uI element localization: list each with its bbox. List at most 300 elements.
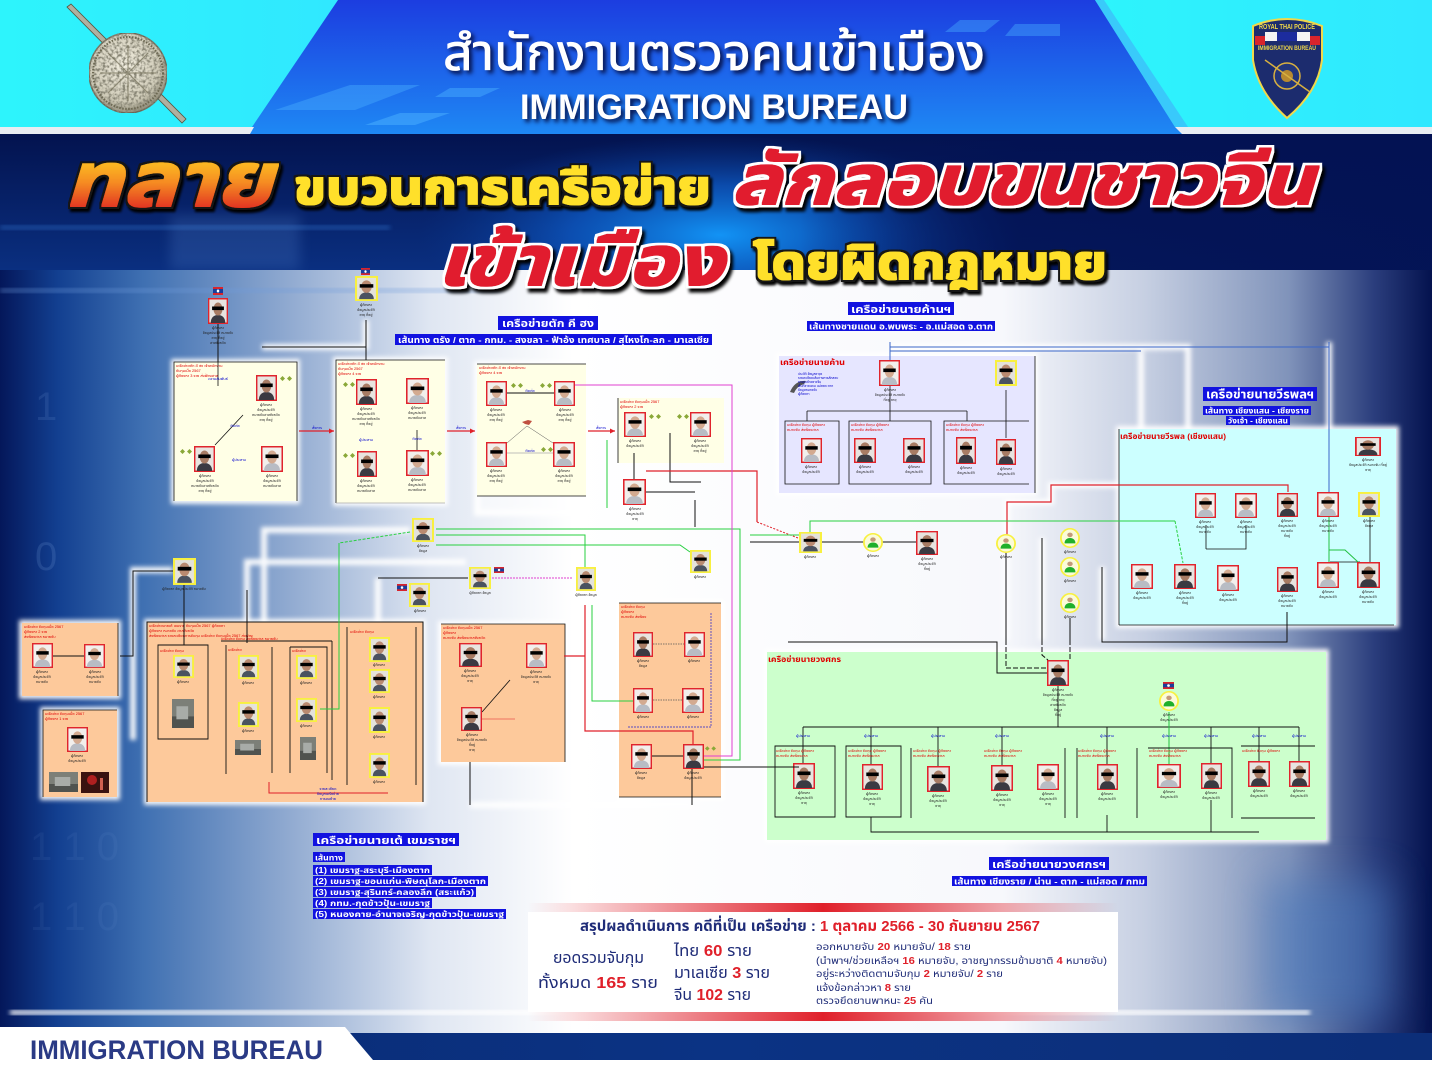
panel: Khan network (lavender): พื้นที่ชายแดน แม่สอด ตาก	[798, 383, 833, 388]
panel: Khan network (lavender): ผู้ต้องหา	[798, 392, 810, 396]
suspect	[1158, 765, 1180, 799]
photo: arrest at night	[81, 772, 109, 793]
panel: orange D	[441, 624, 565, 762]
panel: orange E: เครือข่าย จับกุม	[621, 604, 645, 609]
headline words: smuggling Chinese: ลักลอบขนชาวจีน	[731, 142, 1319, 219]
suspect: ผู้ต้องหา	[558, 469, 571, 473]
suspect: ผู้ต้องหา	[629, 439, 642, 443]
suspect: ผู้ต้องหา	[360, 479, 373, 483]
suspect	[1290, 762, 1309, 798]
panel: Khan network (lavender): หมายจับ ส่งฟ้องศาล	[851, 427, 883, 432]
suspect: ผู้ต้องหา	[798, 791, 811, 795]
suspect	[632, 745, 651, 780]
suspect: หมายจับศาล	[357, 489, 375, 493]
suspect: หมายจับศาลจังหวัด	[191, 484, 219, 488]
suspect: อายุ	[869, 802, 875, 806]
suspect: ผู้ต้องหา	[373, 735, 386, 739]
suspect: ที่อยู่	[469, 742, 475, 747]
suspect: ผู้ต้องหา	[635, 771, 648, 775]
suspect: ข้อมูลประวัติ	[1202, 796, 1220, 800]
suspect: อายุ	[467, 679, 473, 683]
icon: rank markers	[180, 449, 192, 454]
icon: Royal Thai Police immigration badge: ROYAL THAI POLICE	[1259, 22, 1315, 31]
suspect: Wongsakorn leader	[1043, 661, 1073, 717]
suspect: ผู้ต้องหา	[960, 466, 973, 470]
panel: Weeraphon network (cyan)	[1119, 429, 1396, 625]
suspect: ที่อยู่	[924, 566, 930, 571]
suspect: ผู้ต้องหา	[177, 680, 190, 684]
route: Wongsakorn network: เส้นทาง เชียงราย / น่าน - ตาก - แม่สอด / กทม	[954, 876, 1145, 886]
icon: rank markers	[280, 376, 292, 381]
suspect	[487, 443, 506, 483]
panel: left small orange A: ส่งฟ้องศาล หมายจับ	[24, 634, 56, 639]
suspect: อายุ ที่อยู่	[489, 417, 503, 422]
photo	[300, 737, 316, 760]
icon: Royal Thai Police immigration badge: IMMIGRATION BUREAU	[1258, 45, 1316, 52]
suspect: ผู้ต้องหา	[1205, 791, 1218, 795]
suspect: หมายจับ	[1240, 530, 1252, 534]
suspect	[800, 533, 821, 559]
connector lines between networks	[120, 320, 1329, 805]
warrant details: แจ้งข้อกล่าวหา 8 ราย	[816, 981, 911, 994]
route: Khan network: เส้นทางชายแดน อ.พบพระ - อ.แม่สอด จ.ตาก	[809, 320, 993, 332]
summary panel	[528, 903, 1118, 1021]
total arrests: ยอดรวมจับกุม	[553, 950, 644, 967]
suspect: หมายจับศาลจังหวัด	[252, 413, 280, 417]
suspect: ข้อมูลประวัติ	[1290, 794, 1308, 798]
warrant details: (นำพาฯ/ช่วยเหลือฯ 16 หมายจับ, อาชญากรรมข้ามชาติ 4 หมายจับ)	[816, 954, 1107, 967]
suspect: อายุ	[935, 804, 941, 808]
footer band	[0, 1027, 1432, 1070]
avatar: ผู้ต้องหา	[1064, 615, 1077, 619]
suspect: ที่อยู่	[1284, 533, 1290, 538]
route: Dak Ki Hong network: เส้นทาง ตรัง / ตาก - กทม. - สงขลา - ฟ้าอ้ง เทศบาล / สุไหงโก-ลก - มาเลเซีย	[398, 335, 709, 345]
suspect	[1349, 438, 1387, 472]
leader suspect: อายุ ที่อยู่	[211, 335, 225, 340]
suspect	[575, 568, 597, 597]
suspect: ผู้ต้องหา	[1199, 520, 1212, 524]
suspect: ข้อมูลประวัติ	[856, 470, 874, 474]
suspect: ข้อมูลประวัติ	[993, 798, 1011, 802]
panel: cream cell 1	[174, 350, 297, 501]
green lines	[320, 440, 1175, 760]
suspect: อายุ	[801, 801, 807, 805]
title: Dak Ki Hong network: เครือข่ายตัก คี ฮง	[502, 317, 594, 330]
suspect: ข้อมูลประวัติ	[408, 411, 426, 415]
avatar	[1160, 692, 1178, 722]
suspect: ข้อมูลประวัติ	[1319, 524, 1337, 528]
suspect: หมายจับ	[36, 680, 48, 684]
title: Khan network: เครือข่ายนายค้านฯ	[851, 303, 951, 316]
suspect: ข้อมูล	[639, 664, 647, 668]
panel: Wongsakorn network (green): หมายจับ ส่งฟ้องศาล	[1149, 753, 1181, 758]
route: Weeraphon network: เส้นทาง เชียงแสน - เชียงราย	[1205, 405, 1309, 416]
suspect	[1318, 563, 1338, 599]
panel: cream cell 4	[618, 398, 724, 463]
headline: second line	[437, 223, 1107, 300]
suspect	[297, 656, 316, 685]
suspect: ข้อมูลประวัติ หมายจับ	[875, 393, 905, 397]
suspect	[407, 451, 428, 492]
avatar	[1061, 558, 1079, 583]
suspect: ผู้ต้องหา	[1101, 792, 1114, 796]
suspect	[457, 708, 487, 752]
suspect: อายุ ที่อยู่	[558, 417, 572, 422]
icon: rank markers	[705, 746, 716, 751]
suspect	[252, 376, 280, 422]
suspect: ผู้ต้องหา	[1136, 591, 1149, 595]
icon: rank markers	[649, 414, 661, 419]
suspect: ผู้ต้องหา	[411, 478, 424, 482]
suspect: ผู้ต้องหา	[490, 469, 503, 473]
suspect	[875, 361, 905, 402]
title and routes: Te Khemarat network: (1) เขมราฐ-สระบุรี-เมืองตาก	[315, 865, 430, 875]
suspect: ผู้ต้องหา	[242, 681, 255, 685]
suspect	[487, 382, 506, 422]
suspect: ข้อมูลประวัติ หมายจับ	[521, 675, 551, 679]
suspect: ผู้ต้องหา	[687, 715, 700, 719]
panel: cream cell 1: ความสัมพันธ์	[208, 377, 228, 381]
panel: Te Khemarat main orange: เครือข่าย จับกุม ส่งฟ้องศาล หมายจับ	[221, 636, 278, 641]
suspect	[469, 568, 491, 595]
background: navy band and lower light area: 0	[35, 535, 57, 579]
suspect: หมายจับศาล	[408, 416, 426, 420]
suspect: ผู้ต้องหา	[1222, 593, 1235, 597]
avatar	[997, 535, 1015, 559]
panel: Te Khemarat main orange: เครือข่าย จับกุม	[160, 648, 184, 653]
suspect: หมายจับ	[89, 680, 101, 684]
blue lines	[890, 342, 1329, 492]
suspect: ผู้ต้องหา ข้อมูลประวัติ หมายจับ	[162, 587, 206, 591]
connector lines between networks: สั่งการ	[456, 425, 466, 430]
panel: Te Khemarat main orange: ผู้ต้องหา หมายจับ ศาลจังหวัด	[149, 628, 195, 633]
icon: rank markers	[343, 453, 355, 458]
title and routes: Te Khemarat network	[313, 833, 506, 919]
suspect	[1236, 494, 1256, 534]
suspect: ข้อมูลประวัติ	[1196, 525, 1214, 529]
suspect: ข้อมูลประวัติ	[684, 776, 702, 780]
suspect: ผู้ต้องหา	[414, 609, 427, 613]
icon: Royal Thai Police immigration badge	[1253, 19, 1322, 118]
panel: Te Khemarat main orange: ส่งฟ้องศาล รายละเอียดการจับกุม เครือข่าย จับกุมเมื่อ 2567 ส่งฟ้อง	[149, 633, 253, 638]
panel: orange D: เครือข่าย จับกุมเมื่อ 2567	[443, 625, 482, 630]
suspect: ผู้ต้องหา	[996, 793, 1009, 797]
suspect: อายุ	[533, 680, 539, 684]
suspect: หมายจับ	[1362, 600, 1374, 604]
leader suspect: ข้อมูลประวัติ หมายจับ	[203, 331, 233, 335]
suspect: อายุ ที่อยู่	[359, 421, 373, 426]
suspect: Wongsakorn leader: ที่อยู่	[1055, 712, 1061, 717]
panel: cream cell 1: เครือข่ายตัก คี ฮง เจ้าพนักงาน	[176, 363, 223, 368]
red top bar	[528, 903, 1118, 912]
suspect: below cell 4	[624, 480, 645, 521]
title: Weeraphon network: เครือข่ายนายวีรพลฯ	[1206, 388, 1314, 402]
suspect: ข้อมูลประวัติ	[33, 675, 51, 679]
suspect: ผู้ต้องหา	[242, 729, 255, 733]
leader suspect: ผู้ต้องหา	[360, 303, 373, 307]
suspect: ข้อมูลประวัติ	[1219, 598, 1237, 602]
suspect: ผู้ต้องหา	[804, 555, 817, 559]
suspect: Wongsakorn leader: ข้อมูล	[1054, 708, 1062, 712]
suspect: ผู้ต้องหา	[1322, 590, 1335, 594]
header band	[0, 0, 1432, 134]
arrests by nationality: จีน 102 ราย	[674, 987, 751, 1004]
suspect: ผู้ต้องหา	[866, 792, 879, 796]
panel: left small orange A: ผู้ต้องหา 2 ราย	[24, 629, 47, 634]
suspect: below cell 4: ข้อมูลประวัติ	[626, 512, 644, 516]
panel: Wongsakorn network (green): ผู้ประสาน	[995, 734, 1009, 738]
suspect: ข้อมูลประวัติ	[929, 799, 947, 803]
leader suspect: อายุ ที่อยู่	[359, 312, 373, 317]
panel: cream cell 2: จับกุมเมื่อ 2567	[338, 366, 363, 371]
suspect	[928, 767, 949, 808]
suspect: ผู้ต้องหา	[688, 659, 701, 663]
suspect: ข้อมูลประวัติ	[1319, 595, 1337, 599]
suspect: อายุ	[1045, 802, 1051, 806]
avatar	[1061, 594, 1079, 619]
suspect: ผู้ต้องหา	[490, 408, 503, 412]
black lines	[120, 320, 1287, 805]
photo	[235, 740, 261, 755]
suspect: ผู้ต้องหา	[1042, 792, 1055, 796]
headline words: network process: ขบวนการเครือข่าย	[294, 161, 711, 214]
suspect: ผู้ต้องหา ข้อมูล	[469, 591, 491, 595]
panel: Te Khemarat main orange: เครือข่าย	[228, 647, 242, 652]
suspect: ข้อมูลประวัติ	[795, 796, 813, 800]
suspect: หมายจับ	[1322, 529, 1334, 533]
suspect: ข้อมูลประวัติ	[691, 444, 709, 448]
panel: Wongsakorn network (green): เครือข่าย จับกุม ผู้ต้องหา	[1242, 748, 1281, 753]
headline word: enter: เข้าเมือง	[437, 223, 727, 300]
suspect	[413, 519, 433, 553]
panel: Wongsakorn network (green): เครือข่าย จับกุม ผู้ต้องหา	[1078, 748, 1117, 753]
header title: English: IMMIGRATION BUREAU	[520, 88, 908, 127]
suspect	[174, 656, 193, 684]
white glow connectors behind the diagram	[22, 320, 1396, 840]
suspect: ข้อมูลประวัติ	[1278, 599, 1296, 603]
photo	[172, 699, 194, 728]
panel: Khan network (lavender): การขนย้ายชาวจีน	[798, 380, 821, 384]
panel: Te Khemarat main orange: เครือข่ายนายเต้ เขมราช จับกุมเมื่อ 2567 ผู้ต้องหา	[149, 623, 225, 628]
suspect: ข้อมูลประวัติ	[905, 470, 923, 474]
suspect: ผู้ต้องหา	[1179, 591, 1192, 595]
suspect	[691, 413, 710, 453]
suspect: ผู้ต้องหา	[260, 403, 273, 407]
suspect	[352, 380, 380, 426]
flag	[494, 567, 504, 573]
suspect: ข้อมูลประวัติ	[86, 675, 104, 679]
panel: orange D: ผู้ต้องหา	[443, 630, 457, 635]
panel: Wongsakorn network (green): ผู้ประสาน	[931, 734, 945, 738]
warrant details: ตรวจยึดยานพาหนะ 25 คัน	[816, 995, 933, 1007]
suspect: ข้อมูล	[419, 549, 427, 553]
route: Weeraphon network	[1203, 405, 1311, 426]
suspect: ผู้ต้องหา	[1281, 519, 1294, 523]
suspect: ข้อมูลประวัติ	[1133, 596, 1151, 600]
suspect: หมายจับศาล	[263, 484, 281, 488]
panel: Wongsakorn network (green): หมายจับ ส่งฟ้องศาล	[776, 753, 808, 758]
suspect	[794, 764, 814, 805]
suspect: ผู้ต้องหา	[1362, 458, 1375, 462]
panel: cream cell 4: ผู้ต้องหา 2 ราย	[620, 404, 643, 409]
panel: cream cell 3: ผู้ต้องหา 4 ราย	[479, 370, 502, 375]
suspect: ผู้ต้องหา	[637, 715, 650, 719]
avatar: ผู้ต้องหา	[1000, 555, 1013, 559]
suspect: Wongsakorn leader: ที่อยู่ อายุ	[1051, 697, 1065, 702]
icon: sword and silver medal emblem	[67, 4, 186, 123]
suspect	[1318, 493, 1338, 533]
suspect: ข้อมูลประวัติ	[1160, 795, 1178, 799]
suspect	[33, 644, 52, 684]
suspect	[1175, 565, 1195, 605]
suspect	[555, 382, 574, 422]
suspect	[684, 745, 703, 780]
title and routes: Te Khemarat network: เส้นทาง	[315, 852, 343, 862]
warrant details: ออกหมายจับ 20 หมายจับ/ 18 ราย	[816, 941, 971, 953]
suspect	[683, 689, 703, 719]
title: Dak Ki Hong network	[498, 316, 598, 330]
total arrests: ทั้งหมด 165 ราย	[538, 972, 658, 992]
suspect: ผู้ต้องหา	[1281, 594, 1294, 598]
leader suspect	[203, 299, 233, 345]
footer label: IMMIGRATION BUREAU	[30, 1035, 323, 1065]
suspect: ข้อมูลประวัติ	[461, 674, 479, 678]
suspect: ข้อมูลประวัติ	[1098, 797, 1116, 801]
suspect: ผู้ต้องหา	[36, 670, 49, 674]
panel: Wongsakorn network (green): ผู้ประสาน	[1204, 734, 1218, 738]
suspect: Wongsakorn leader: ข้อมูลประวัติ หมายจับ	[1043, 693, 1073, 697]
suspect	[863, 765, 882, 806]
suspect: ผู้ต้องหา	[559, 408, 572, 412]
suspect: ผู้ต้องหา	[300, 724, 313, 728]
suspect: ข้อมูลประวัติ	[863, 797, 881, 801]
suspect: ข้อมูลประวัติ	[1039, 797, 1057, 801]
panel: Te Khemarat main orange: การขนย้าย	[320, 797, 336, 801]
panel: Wongsakorn network (green): เครือข่าย จับกุม ผู้ต้องหา	[1149, 748, 1188, 753]
arrests by nationality: ไทย 60 ราย	[673, 943, 752, 960]
panel: cream cell 3: ติดต่อ	[525, 389, 535, 393]
suspect: ข้อมูลประวัติ	[487, 413, 505, 417]
suspect: ผู้ต้องหา	[89, 670, 102, 674]
icon: rank markers	[541, 447, 553, 452]
suspect: ผู้ต้องหา	[464, 669, 477, 673]
panel: cream cell 1: ติดต่อ	[230, 424, 240, 428]
suspect: ผู้ต้องหา	[694, 439, 707, 443]
suspect	[1278, 494, 1297, 538]
suspect	[996, 361, 1016, 385]
suspect: ผู้ต้องหา	[859, 465, 872, 469]
suspect: ข้อมูลประวัติ หมายจับ	[457, 738, 487, 742]
suspect: หมายจับ	[1281, 604, 1293, 608]
panel: left small orange B: เครือข่าย จับกุมเมื่อ 2567	[45, 711, 84, 716]
panel: cream cell 2	[336, 360, 445, 503]
suspect	[370, 708, 389, 739]
suspect: อายุ ที่อยู่	[198, 488, 212, 493]
headline words: illegally: โดยผิดกฎหมาย	[753, 236, 1107, 289]
avatar: ข้อมูลประวัติ	[1160, 718, 1178, 722]
panel: orange D: หมายจับ ส่งฟ้องศาลจังหวัด	[443, 635, 486, 640]
suspect: หมายจับ	[1281, 529, 1293, 533]
suspect: อายุ	[469, 748, 475, 752]
suspect: ข้อมูลประวัติ	[556, 413, 574, 417]
suspect: ข้อมูลประวัติ	[1278, 524, 1296, 528]
avatar: ผู้ต้องหา	[1163, 713, 1176, 717]
suspect: ข้อมูลประวัติ	[196, 479, 214, 483]
suspect: ข้อมูลประวัติ	[357, 484, 375, 488]
panel: left small orange A	[22, 623, 118, 696]
panel: Te Khemarat main orange: รายละเอียด	[320, 787, 337, 791]
icon: rank markers	[540, 383, 552, 388]
panel: Wongsakorn network (green): หมายจับ ส่งฟ้องศาล	[913, 753, 945, 758]
suspect	[802, 439, 821, 474]
suspect: ข้อมูลประวัติ	[1359, 595, 1377, 599]
suspect	[997, 440, 1015, 476]
title and routes: Te Khemarat network: (4) กทม.-กุดข้าวปุ้น-เขมราฐ	[315, 898, 431, 908]
suspect	[685, 633, 704, 663]
suspect	[191, 447, 219, 493]
avatar: ผู้ต้องหา	[867, 554, 880, 558]
middle yellow suspects	[162, 519, 1079, 619]
panel: Wongsakorn network (green): เครือข่าย จับกุม ผู้ต้องหา	[913, 748, 952, 753]
icon: rank markers	[677, 414, 689, 419]
suspect: ที่อยู่ อายุ	[883, 397, 897, 402]
panel: orange E: หมายจับ ส่งฟ้อง	[621, 614, 646, 619]
connector lines between networks: สั่งการ	[312, 425, 322, 430]
panel: Khan network (lavender): เครือข่าย จับกุม ผู้ต้องหา	[787, 422, 826, 427]
panel: cream cell 2: ติดต่อ	[412, 437, 422, 441]
suspect	[410, 584, 429, 613]
top suspects with flags	[203, 268, 377, 345]
suspect: ข้อมูลประวัติ	[68, 759, 86, 763]
suspect	[521, 644, 551, 684]
suspect: ผู้ต้องหา	[637, 659, 650, 663]
panel: Khan network (lavender): ประวัติ ข้อมูลอาวุธ	[798, 372, 822, 376]
suspect: below cell 4: ผู้ต้องหา	[629, 507, 642, 511]
suspect: ผู้ต้องหา	[694, 575, 707, 579]
suspect: ผู้ต้องหา	[466, 733, 479, 737]
suspect	[1038, 765, 1058, 806]
title and routes: Te Khemarat network: เครือข่ายนายเต้ เขมราชฯ	[316, 834, 456, 847]
panel: left small orange A: เครือข่าย จับกุมเมื่อ 2567	[24, 624, 63, 629]
suspect: ข้อมูลประวัติ	[1176, 596, 1194, 600]
suspect: ผู้ต้องหา	[373, 695, 386, 699]
suspect: ที่อยู่	[1182, 600, 1188, 605]
background: navy band and lower light area: 1 1 0	[30, 895, 119, 939]
suspect: ผู้ต้องหา	[266, 474, 279, 478]
suspect: อายุ	[1365, 468, 1371, 472]
suspect	[634, 689, 652, 719]
connector lines between networks: สั่งการ	[596, 425, 606, 430]
background: navy band and lower light area: 1	[35, 385, 57, 429]
suspect: ข้อมูลประวัติ	[918, 562, 936, 566]
panel: orange E	[619, 603, 721, 797]
panel: Te Khemarat main orange: ข้อมูลเครือข่าย	[317, 792, 339, 796]
suspect	[917, 532, 937, 571]
suspect: ผู้ต้องหา	[71, 754, 84, 758]
suspect: ข้อมูลประวัติ	[957, 471, 975, 475]
suspect: ผู้ต้องหา	[199, 474, 212, 478]
panel: Weeraphon network (cyan): เครือข่ายนายวีรพล (เชียงแสน)	[1120, 432, 1227, 441]
panel: Wongsakorn network (green): หมายจับ ส่งฟ้องศาล	[848, 753, 880, 758]
suspect: หมายจับ	[1199, 530, 1211, 534]
panel: cream cell 1: ผู้ต้องหา 3 ราย ส่งฟ้องศาล	[176, 373, 218, 378]
suspect	[691, 551, 710, 579]
total arrests	[538, 950, 658, 992]
panel: Wongsakorn network (green): เครือข่าย จับกุม ผู้ต้องหา	[776, 748, 815, 753]
suspect: ข้อมูล	[1365, 524, 1373, 528]
avatar	[1061, 529, 1079, 554]
suspect: ผู้ต้องหา	[417, 544, 430, 548]
